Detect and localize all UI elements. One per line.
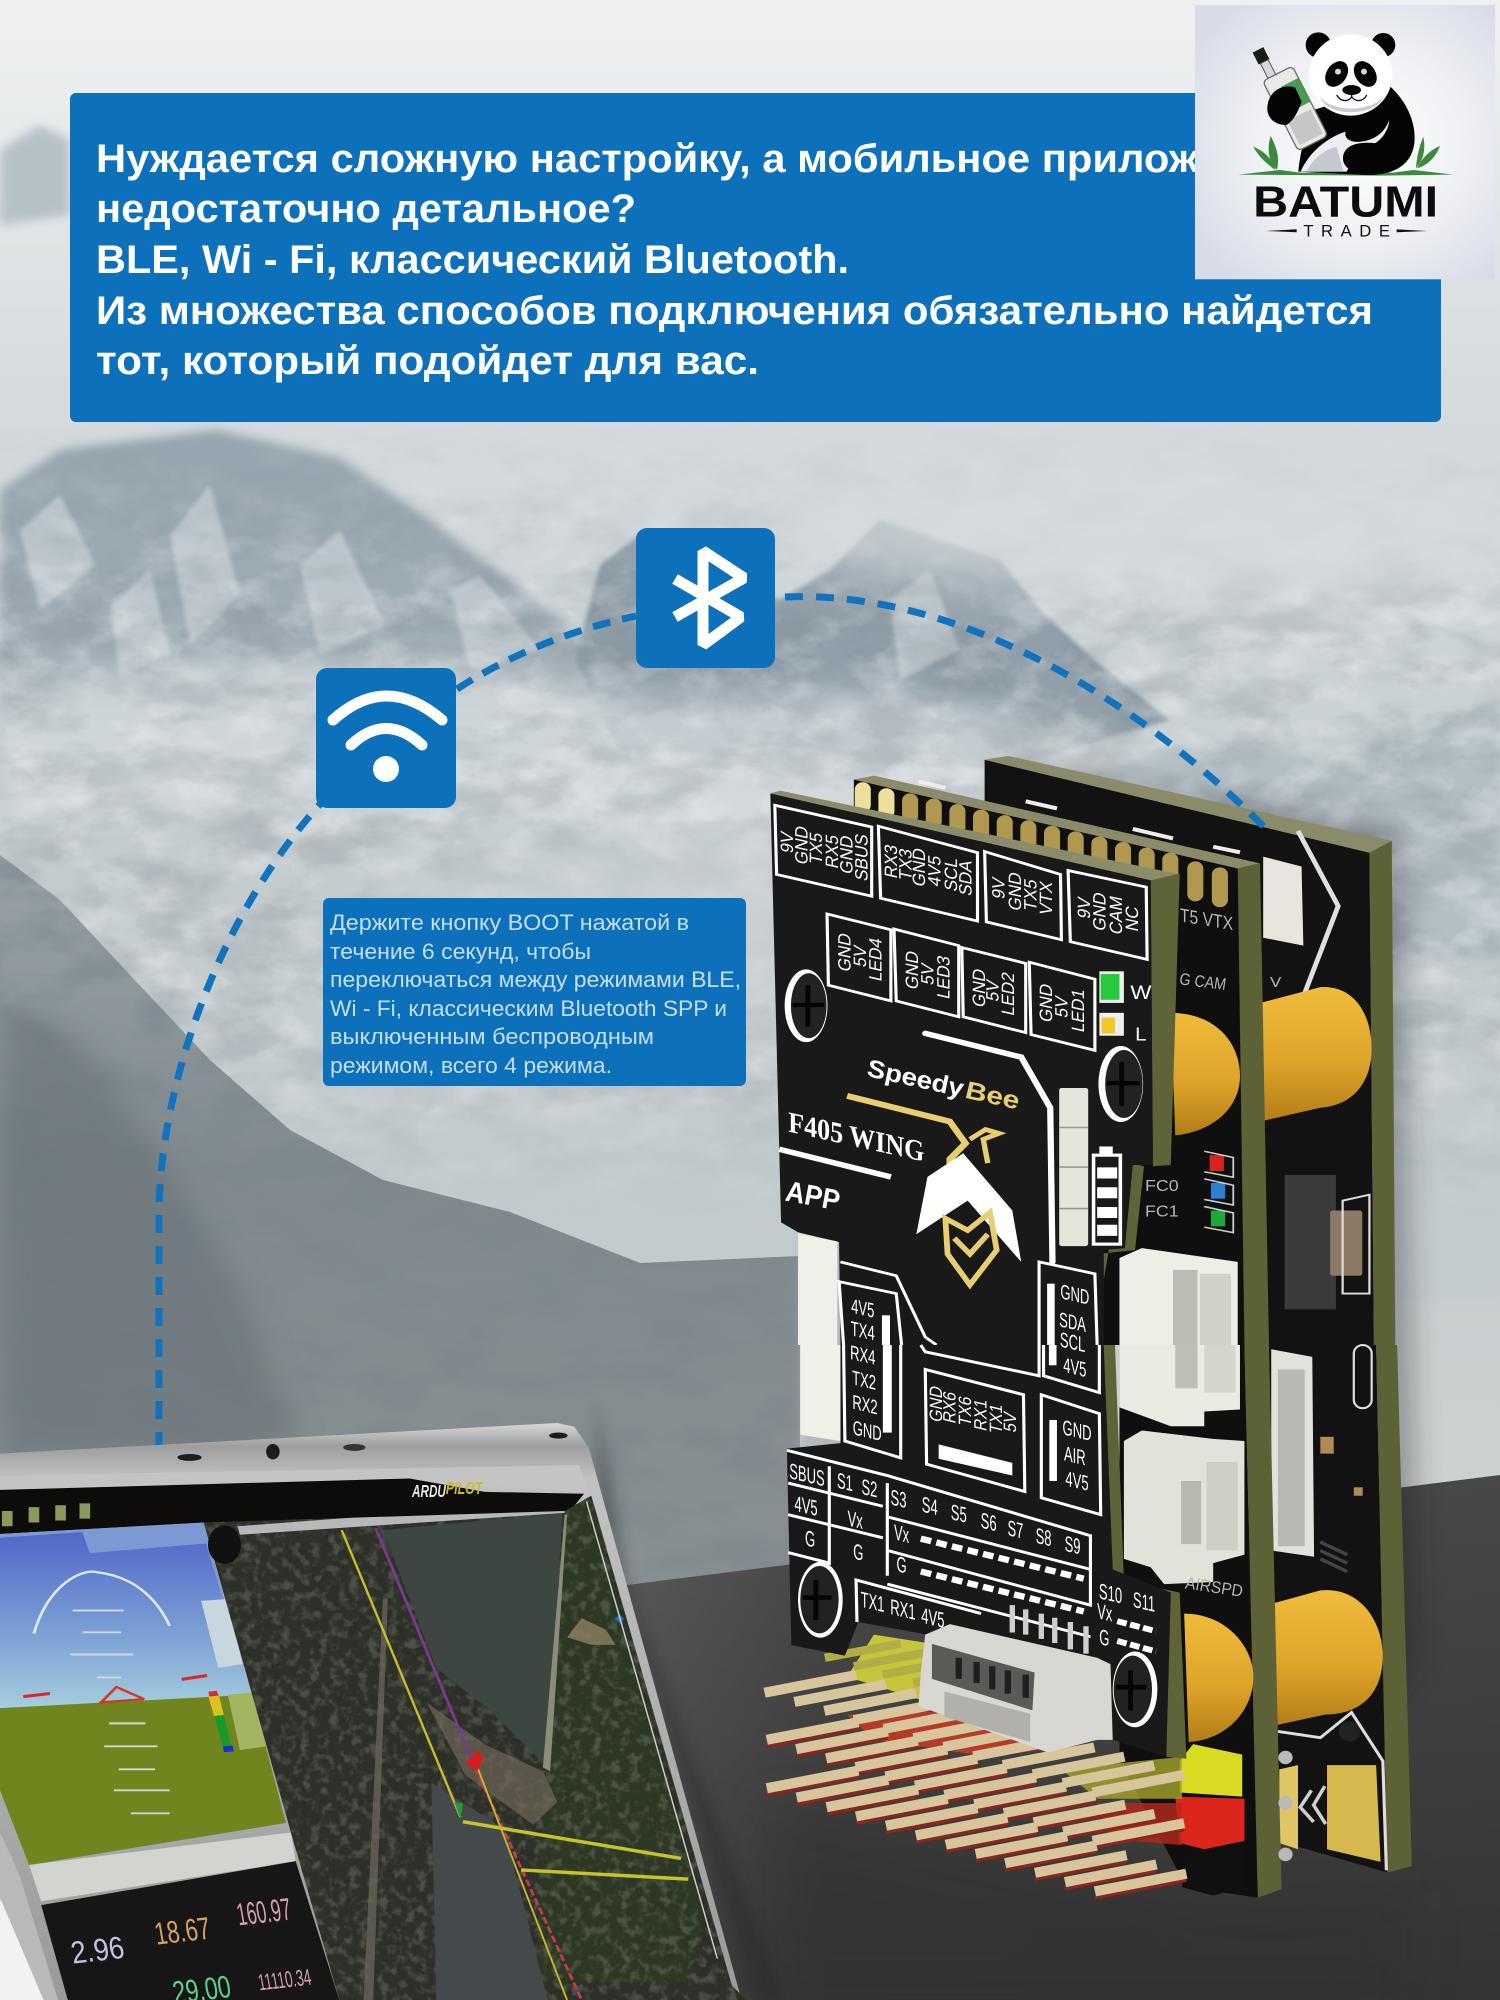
- front board lower section with servo labels: S8: [1036, 1523, 1052, 1551]
- rear board: [985, 756, 1412, 1872]
- front board lower section with servo labels: GND: [1063, 1415, 1092, 1446]
- laptop running ArduPilot ground station: [0, 1400, 785, 2000]
- front board lower section with servo labels: RX1: [970, 1397, 991, 1433]
- front board upper section: LED3: [933, 953, 953, 1001]
- front board upper section: NC: [1122, 904, 1142, 933]
- six-pin white connector: [919, 1624, 1113, 1752]
- front board upper section: 9V: [777, 829, 797, 855]
- front board lower section with servo labels: [787, 1327, 1186, 1759]
- middle board: [854, 776, 1293, 1898]
- front board lower section with servo labels: S10: [1099, 1579, 1122, 1608]
- front board upper section: W: [1130, 982, 1152, 1004]
- front board lower section with servo labels: 5V: [999, 1409, 1020, 1434]
- front board upper section: [770, 791, 1180, 1345]
- front board upper section: GND: [1060, 1279, 1089, 1309]
- laptop running ArduPilot ground station: 11110.34: [256, 1964, 313, 1996]
- front board lower section with servo labels: G: [805, 1526, 815, 1552]
- front board upper section: 9V: [988, 875, 1008, 901]
- front board lower section with servo labels: 4V5: [794, 1491, 818, 1521]
- front board lower section with servo labels: TX2: [852, 1365, 876, 1395]
- laptop running ArduPilot ground station: PILOT: [446, 1479, 483, 1498]
- front board upper section: F405 WING: [788, 1106, 924, 1169]
- front board lower section with servo labels: S9: [1065, 1531, 1081, 1559]
- front board lower section with servo labels: 4V5: [1065, 1466, 1089, 1496]
- Wi-Fi icon: [316, 668, 456, 808]
- front board upper section: TX5: [1020, 877, 1040, 913]
- front board lower section with servo labels: Vx: [848, 1506, 863, 1534]
- front board upper section: 4V5: [924, 853, 944, 888]
- front board lower section with servo labels: RX1: [890, 1595, 916, 1625]
- callout: BOOT button instruction: выключенным беспроводным: [330, 1024, 654, 1049]
- front board upper section: 4V5: [851, 1294, 874, 1323]
- front board lower section with servo labels: RX2: [852, 1390, 878, 1419]
- front board lower section with servo labels: RX4: [850, 1340, 876, 1370]
- front board lower section with servo labels: RX6: [939, 1389, 960, 1425]
- callout: BOOT button instruction: переключаться между режимами BLE,: [330, 967, 741, 992]
- headline panel: недостаточно детальное?: [96, 187, 636, 231]
- laptop running ArduPilot ground station: 18.67: [152, 1911, 213, 1952]
- front board upper section: APP: [785, 1174, 840, 1217]
- callout: BOOT button instruction: Держите кнопку BOOT нажатой в: [330, 910, 689, 935]
- callout: BOOT button instruction: течение 6 секунд, чтобы: [330, 939, 591, 964]
- front board lower section with servo labels: G: [853, 1539, 863, 1566]
- flight controller stack: SpeedyBee F405 WING: [765, 756, 1412, 1898]
- front board upper section: GND: [836, 833, 857, 876]
- front board lower section with servo labels: GND: [853, 1415, 882, 1446]
- front board lower section with servo labels: S5: [951, 1500, 967, 1528]
- front board upper section: L: [1135, 1025, 1147, 1045]
- headline panel: [70, 93, 1441, 422]
- front board upper section: Bee: [965, 1075, 1019, 1115]
- middle board: AIRSPD: [1184, 1573, 1244, 1601]
- front board upper section: RX5: [822, 832, 842, 870]
- front board lower section with servo labels: SCL: [1060, 1327, 1085, 1357]
- pin headers: yellow, red and black: [765, 1635, 1244, 1898]
- front board lower section with servo labels: 4V5: [921, 1603, 944, 1633]
- middle board: G CAM: [1178, 969, 1228, 994]
- headline panel: тот, который подойдет для вас.: [96, 339, 759, 383]
- front board upper section: TX3: [895, 846, 915, 882]
- front board lower section with servo labels: G: [1099, 1625, 1109, 1651]
- front board lower section with servo labels: S7: [1007, 1516, 1023, 1544]
- front board upper section: 5V: [982, 978, 1003, 1003]
- front board upper section: SDA: [1059, 1307, 1086, 1337]
- front board upper section: RX3: [881, 842, 901, 880]
- front board lower section with servo labels: S11: [1133, 1587, 1155, 1617]
- logo: Batumi Trade panda: TRADE: [1303, 221, 1390, 240]
- front board upper section: GND: [1089, 890, 1110, 933]
- front board lower section with servo labels: GND: [925, 1384, 946, 1424]
- background: snowy mountain landscape: [0, 125, 1500, 1640]
- front board upper section: LED2: [998, 970, 1018, 1017]
- front board upper section: LED1: [1068, 987, 1088, 1034]
- front board lower section with servo labels: Vx: [894, 1520, 909, 1548]
- callout: BOOT button instruction: режимом, всего 4 режима.: [330, 1053, 612, 1078]
- front board upper section: GND: [909, 846, 929, 888]
- dashed connection arc: laptop to Wi-Fi: [159, 802, 322, 1450]
- front board upper section: GND: [791, 824, 811, 866]
- callout: BOOT button instruction: Wi - Fi, классическим Bluetooth SPP и: [330, 996, 727, 1021]
- front board lower section with servo labels: 4V5: [1063, 1353, 1087, 1382]
- front board lower section with servo labels: G: [897, 1552, 907, 1578]
- middle board: T5 VTX: [1180, 904, 1233, 935]
- laptop running ArduPilot ground station: ARDU: [411, 1482, 446, 1501]
- laptop running ArduPilot ground station: 2.96: [68, 1930, 127, 1971]
- front board lower section with servo labels: TX1: [985, 1401, 1006, 1436]
- front board lower section with servo labels: S2: [861, 1475, 877, 1502]
- front board upper section: SDA: [956, 858, 976, 898]
- soft shadow behind flight controller: [1000, 760, 1420, 1760]
- front board upper section: 5V: [850, 943, 870, 969]
- front board upper section: 5V: [918, 961, 938, 987]
- front board upper section: VTX: [1036, 879, 1056, 917]
- front board lower section with servo labels: SBUS: [789, 1459, 825, 1491]
- rear gold capacitors: [1260, 987, 1383, 1727]
- front board upper section: CAM: [1106, 894, 1126, 936]
- callout: BOOT button instruction: [323, 898, 746, 1086]
- front board lower section with servo labels: AIR: [1064, 1441, 1086, 1470]
- front board upper section: 5V: [1052, 994, 1072, 1019]
- headline panel: Нуждается сложную настройку, а мобильное приложение: [96, 137, 1295, 181]
- front board upper section: TX5: [806, 830, 826, 866]
- front board lower section with servo labels: S1: [837, 1468, 853, 1496]
- front board lower section with servo labels: TX1: [861, 1587, 885, 1617]
- middle board: FC0: [1145, 1177, 1179, 1195]
- front board upper section: SCL: [941, 855, 961, 893]
- dashed connection arc: Bluetooth to flight controller: [785, 597, 1269, 832]
- front board lower section with servo labels: S4: [922, 1492, 938, 1520]
- headline panel: Из множества способов подключения обязательно найдется: [96, 289, 1373, 333]
- front board lower section with servo labels: S3: [891, 1485, 906, 1513]
- front board upper section: GND: [1036, 982, 1056, 1024]
- front board upper section: 9V: [1074, 895, 1094, 921]
- headline panel: BLE, Wi - Fi, классический Bluetooth.: [96, 238, 849, 282]
- logo: Batumi Trade panda: BATUMI: [1253, 178, 1438, 227]
- laptop running ArduPilot ground station: 160.97: [234, 1892, 294, 1932]
- middle board: FC1: [1145, 1202, 1179, 1220]
- front board lower section with servo labels: Vx: [1097, 1599, 1112, 1626]
- logo: Batumi Trade panda: [1195, 5, 1495, 279]
- table surface: [460, 1475, 1500, 2000]
- front board lower section with servo labels: TX6: [954, 1394, 975, 1428]
- front board upper section: LED4: [865, 936, 886, 983]
- dashed connection arc: Wi-Fi to Bluetooth: [457, 616, 636, 689]
- front board upper section: TX4: [851, 1316, 875, 1345]
- front board lower section with servo labels: S6: [981, 1508, 997, 1536]
- front board upper section: SBUS: [852, 832, 872, 883]
- front board upper section: GND: [834, 931, 854, 973]
- Bluetooth icon: [636, 528, 775, 668]
- front board upper section: GND: [969, 967, 989, 1009]
- front board upper section: GND: [902, 949, 922, 991]
- front board upper section: Speedy: [867, 1053, 965, 1103]
- front board upper section: GND: [1005, 870, 1025, 912]
- rear board: V: [1270, 974, 1282, 991]
